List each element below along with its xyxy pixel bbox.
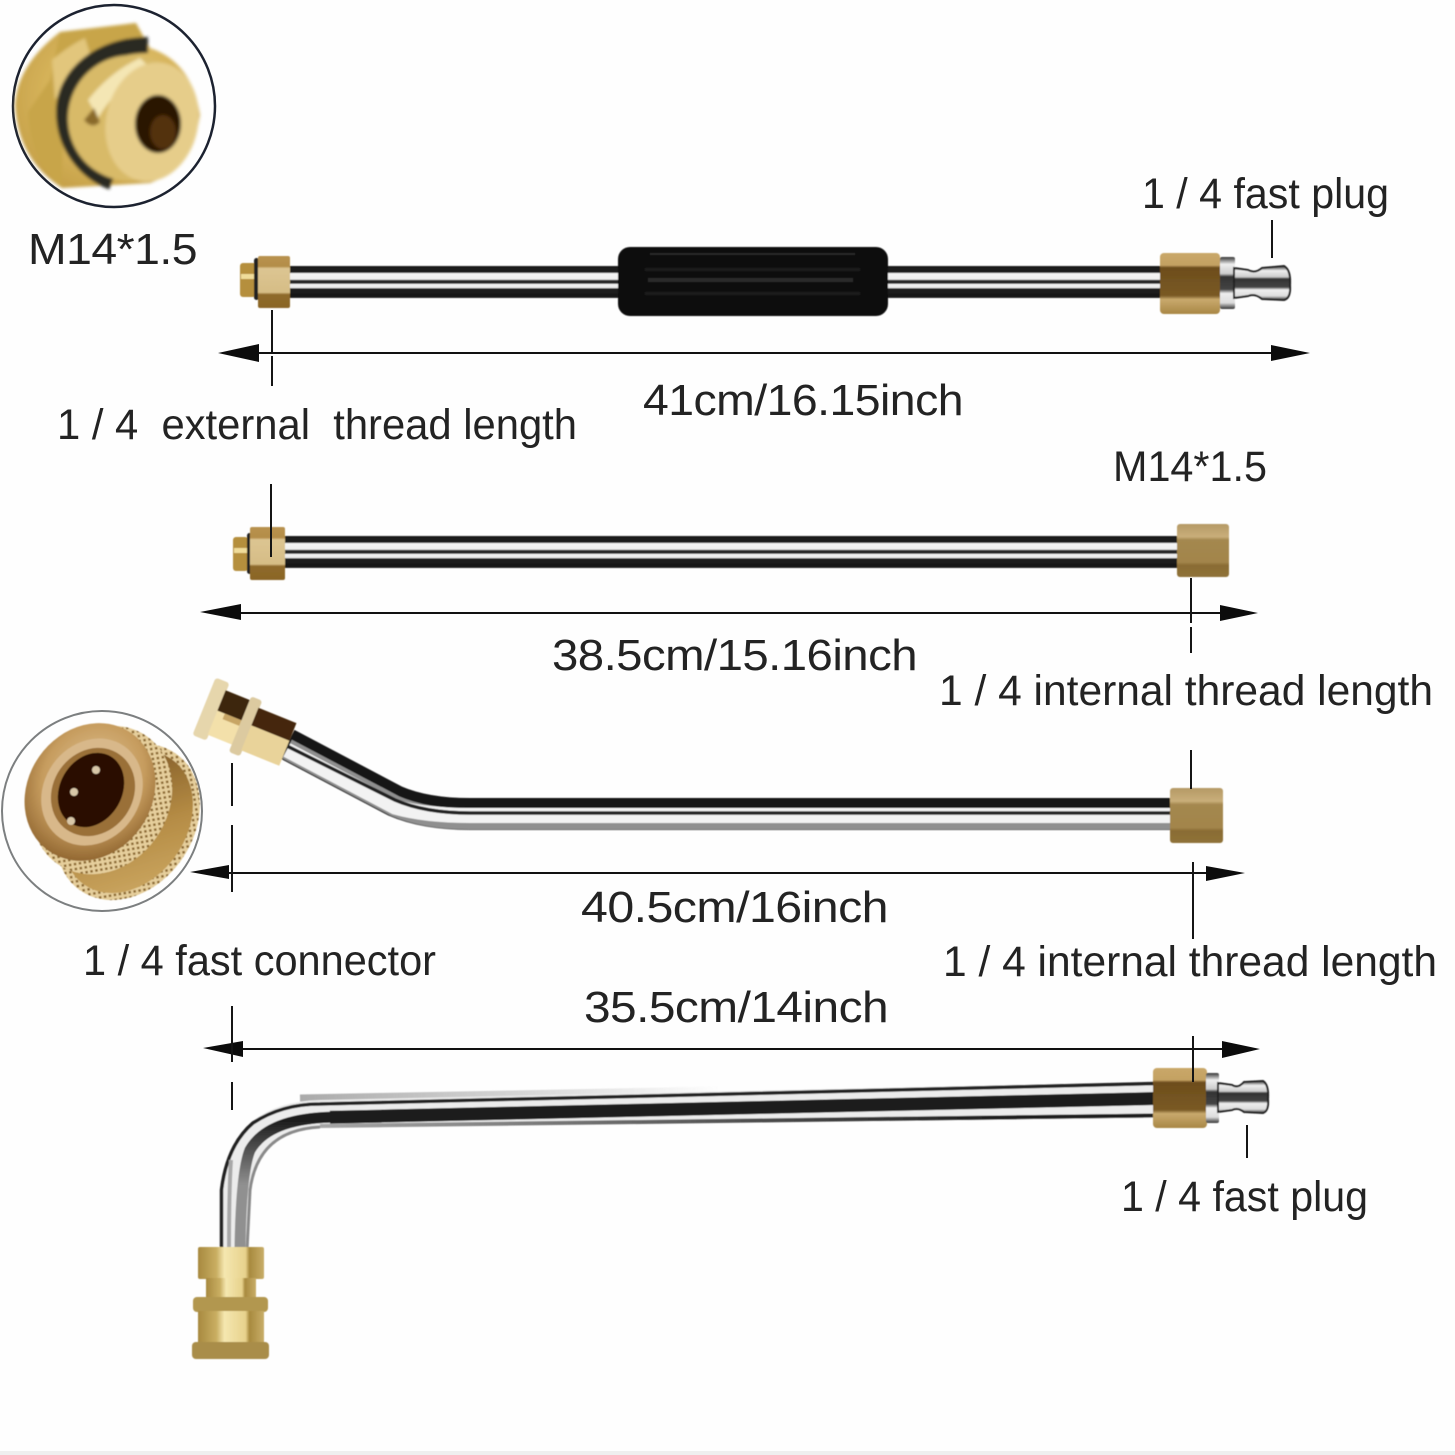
wand 4: L shaped [192, 1068, 1268, 1359]
inset: quick connector detail [0, 697, 225, 923]
label: M14*1.5 wand 2: M14*1.5 [1113, 443, 1267, 491]
wand 1: straight with grip [240, 247, 1290, 316]
label: 1/4 internal thread length lower: 1 / 4 internal thread length [943, 938, 1437, 986]
label: 1/4 fast connector: 1 / 4 fast connector [83, 937, 436, 985]
quick plug [1220, 257, 1290, 309]
label: 41cm/16.15inch: 41cm/16.15inch [643, 376, 963, 425]
wand 2: straight [233, 524, 1229, 580]
label: 1/4 fast plug top: 1 / 4 fast plug [1142, 170, 1389, 218]
guide lines [232, 220, 1272, 1158]
connector balls [67, 766, 100, 825]
label: 35.5cm/14inch: 35.5cm/14inch [584, 983, 888, 1032]
wand 3: angled [192, 678, 1223, 843]
label: M14*1.5 inset: M14*1.5 [28, 225, 197, 274]
right brass hex [1160, 253, 1220, 314]
dimension: 38.5cm [200, 604, 1258, 621]
grip [618, 247, 888, 316]
right brass female nut [1177, 524, 1229, 577]
label: 40.5cm/16inch: 40.5cm/16inch [581, 883, 888, 932]
dimension: 40.5cm [190, 865, 1245, 881]
right brass hex [1153, 1068, 1207, 1128]
label: 1/4 fast plug bottom: 1 / 4 fast plug [1121, 1173, 1368, 1221]
dimension: 41cm [218, 344, 1310, 362]
left fitting [240, 256, 290, 308]
dimension: 35.5cm [203, 1041, 1260, 1058]
left fitting [233, 527, 285, 580]
inset: M14 male thread detail [13, 5, 215, 207]
label: 1/4 external thread length: 1 / 4 external thread length [57, 401, 577, 449]
bottom quick connector [192, 1247, 269, 1359]
angled quick connector [192, 678, 301, 771]
label: 1/4 internal thread length upper: 1 / 4 internal thread length [939, 667, 1433, 715]
right brass nut [1170, 788, 1223, 843]
quick plug [1206, 1073, 1268, 1123]
label: 38.5cm/15.16inch: 38.5cm/15.16inch [552, 631, 917, 680]
